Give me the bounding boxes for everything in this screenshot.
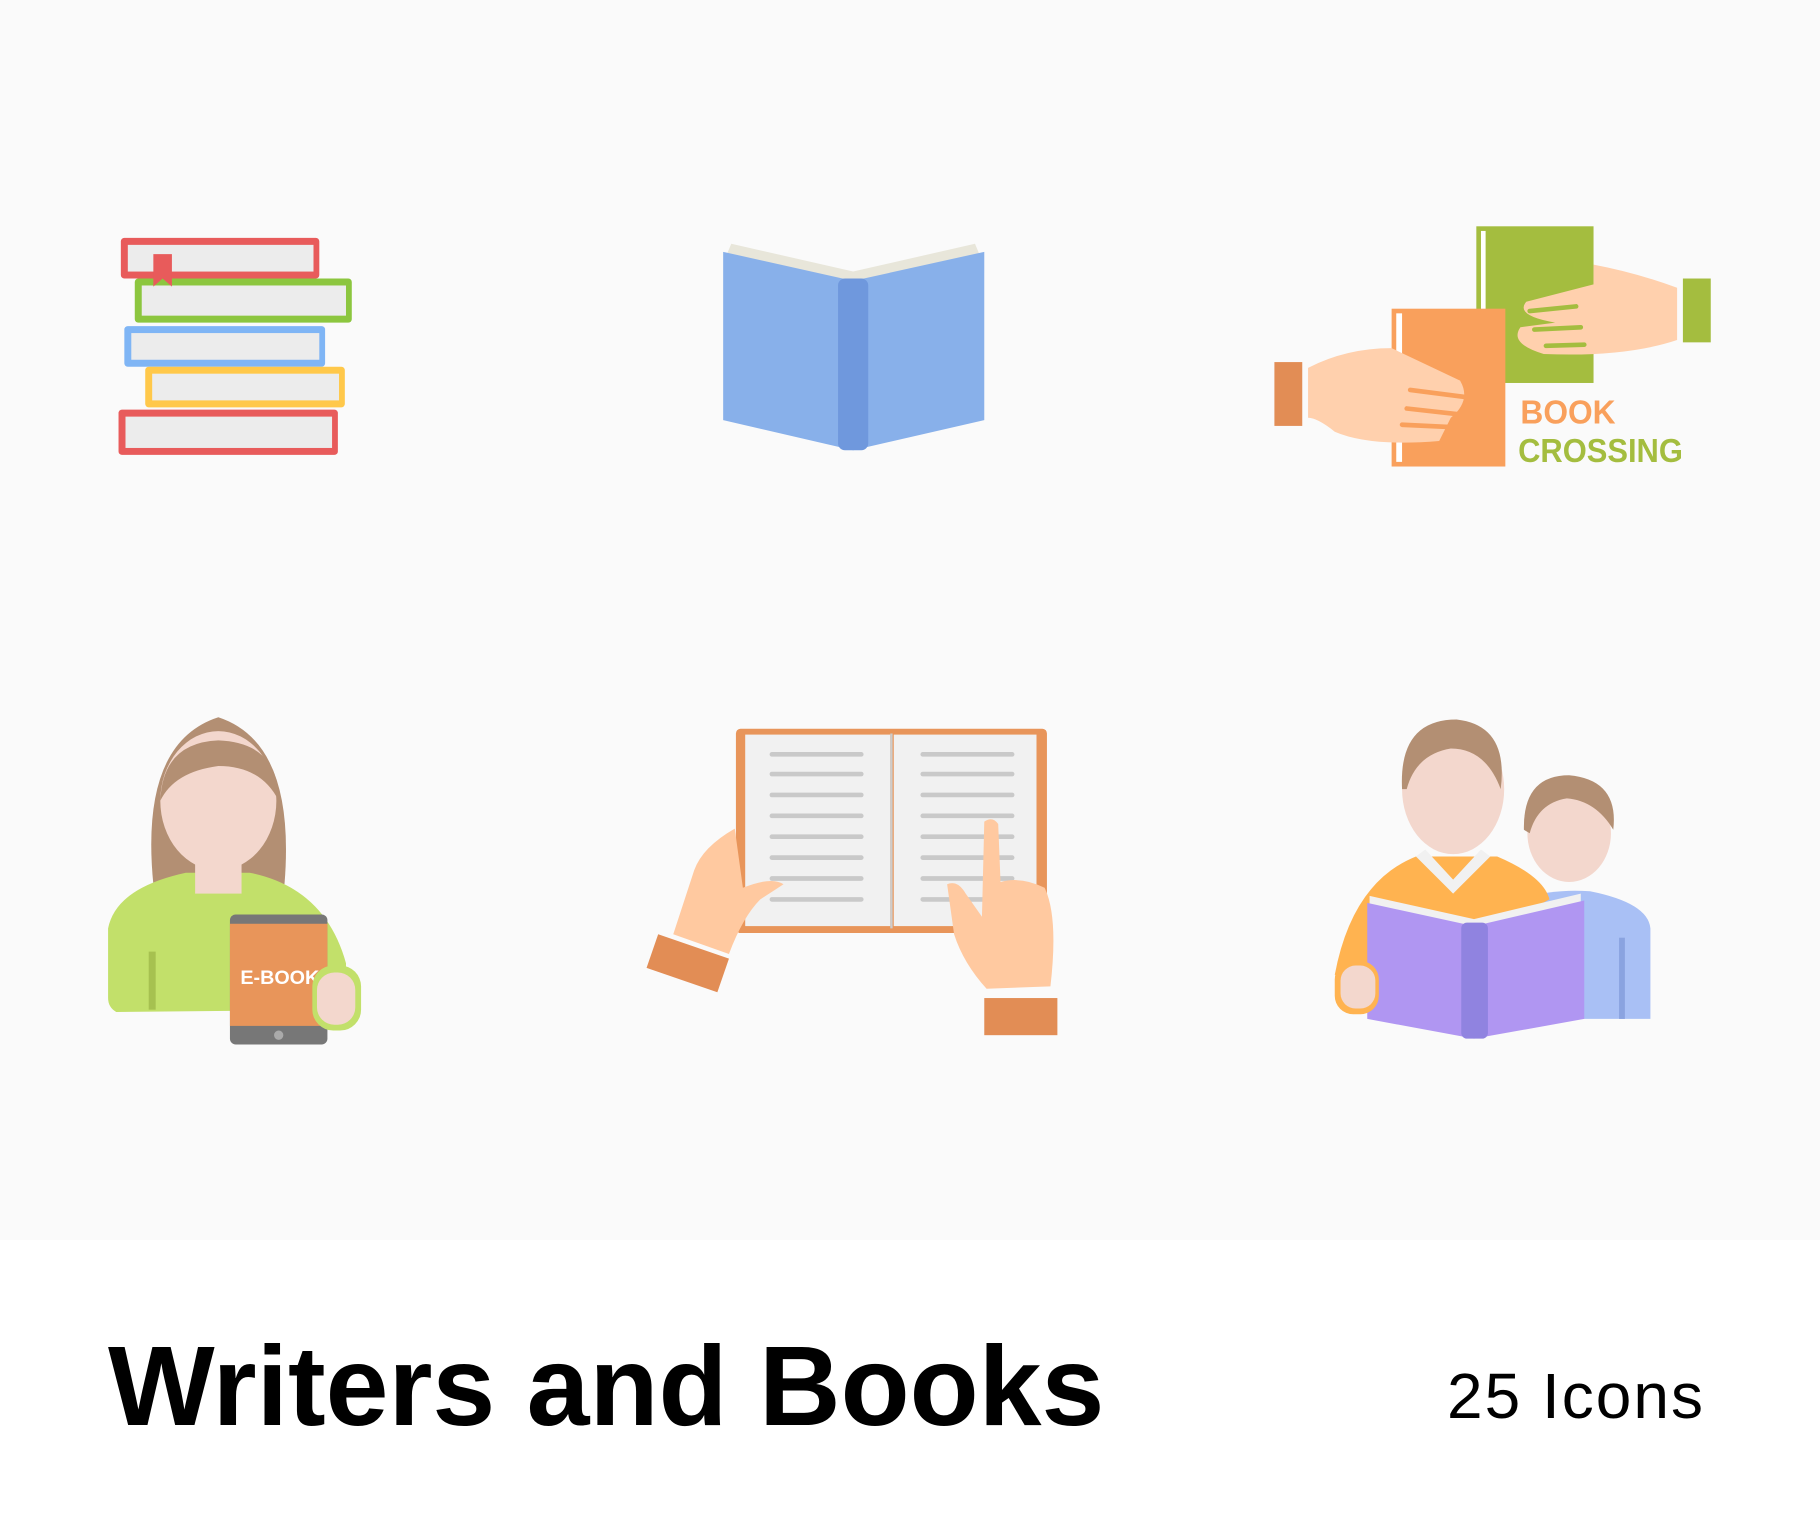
icon: hands holding open book — [647, 729, 1057, 1035]
icon count: 25 Icons — [1447, 1360, 1705, 1432]
icon: woman with e-book — [108, 717, 361, 1044]
icon: book crossing — [1274, 226, 1711, 470]
title: Writers and Books — [108, 1323, 1104, 1449]
icon: book crossing: BOOK — [1520, 395, 1616, 432]
icon: adult and child reading — [1335, 720, 1650, 1039]
icon: woman with e-book: E-BOOK — [240, 967, 320, 989]
icon: book crossing: CROSSING — [1518, 433, 1683, 470]
icon: book stack — [119, 238, 352, 455]
icon: open book — [723, 244, 984, 450]
